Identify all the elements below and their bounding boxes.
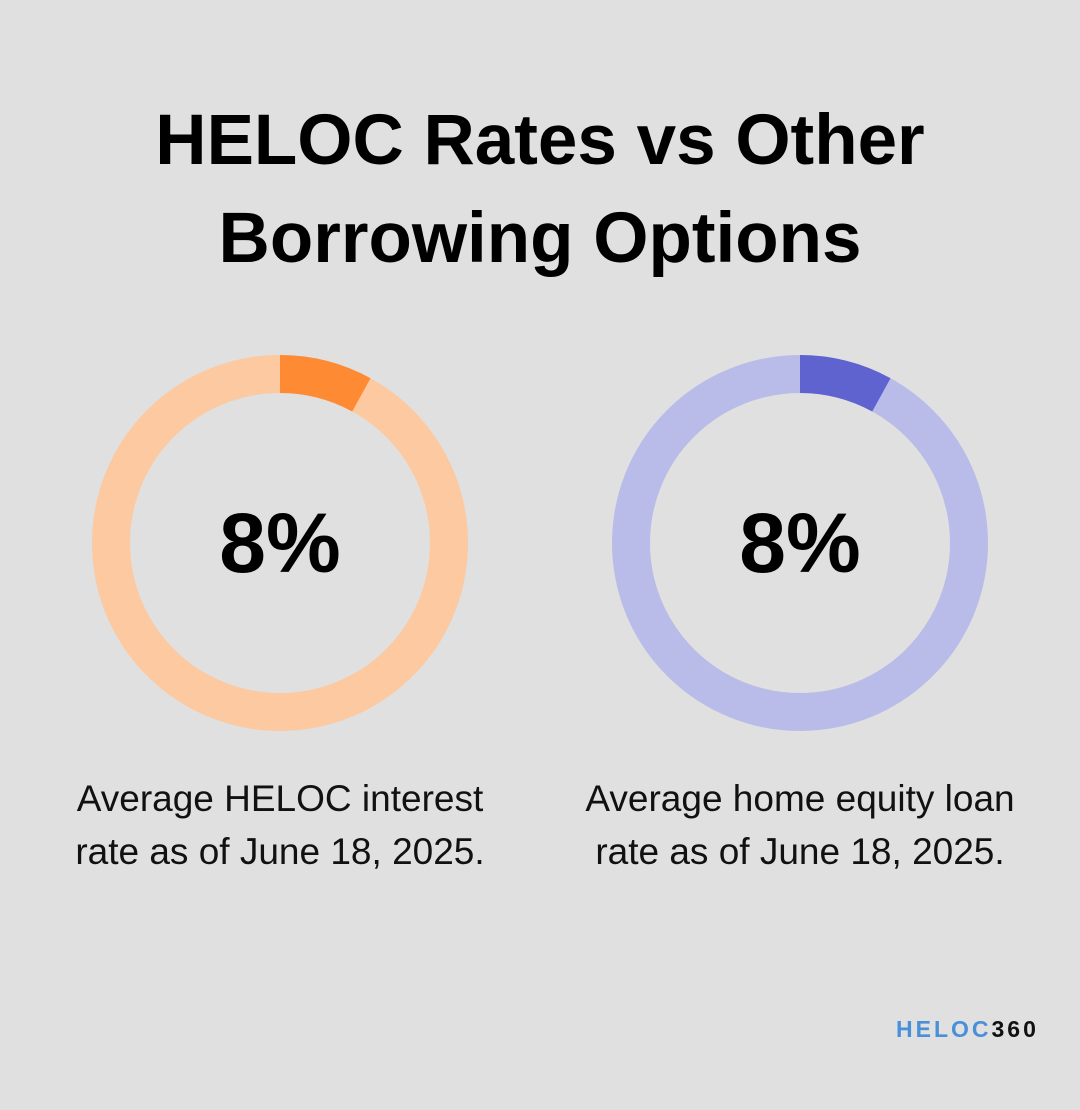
title — [155, 101, 925, 278]
title: Borrowing Options — [219, 199, 861, 278]
logo: HELOC360 — [896, 1016, 1039, 1042]
donut: HELOC: 8% — [219, 496, 341, 590]
donut: HELOC — [92, 355, 468, 731]
donut: home equity: 8% — [739, 496, 861, 590]
donut: home equity — [612, 355, 988, 731]
caption: HELOC: Average HELOC interest rate as of June 18, 2025. — [75, 778, 485, 872]
caption: home equity: Average home equity loan rate as of June 18, 2025. — [585, 778, 1015, 872]
title: HELOC Rates vs Other — [155, 101, 925, 180]
